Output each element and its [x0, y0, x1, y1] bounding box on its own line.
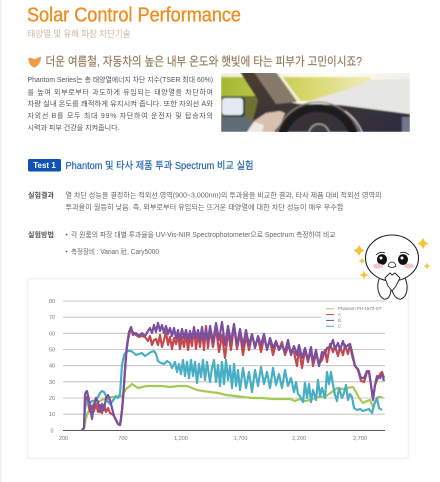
y axis labels: 60 — [49, 331, 55, 337]
x axis labels: 2,200 — [292, 436, 306, 442]
test result text: 열 차단 성능을 결정하는 적외선 영역(900~3,000nm)의 투과율을 비교한 결과, 타사 제품 대비 적외선 영역의 — [66, 190, 382, 200]
label: test result: 실험결과 — [28, 190, 55, 200]
y axis labels: 10 — [49, 412, 55, 418]
test method list: 각 원룸의 파장 대별 투과율을 UV-Vis-NIR Spectrophotometer으로 Spectrum 측정하여 비교 — [71, 230, 336, 239]
sparkles — [354, 238, 430, 280]
y axis labels: 40 — [49, 364, 55, 370]
series: B — [82, 322, 384, 430]
x axis labels — [59, 436, 367, 442]
x axis labels: 1,200 — [174, 436, 188, 442]
x axis labels: 2,700 — [353, 436, 367, 442]
intro paragraph: 차량 실내 온도를 쾌적하게 유지시켜 줍니다. 또한 자외선 A와 — [28, 99, 214, 108]
intro paragraph — [28, 75, 214, 132]
character mouth — [388, 262, 396, 268]
y axis labels: 0 — [50, 428, 54, 434]
character eyes — [376, 252, 409, 265]
test heading: Phantom 및 타사 제품 투과 Spectrum 비교 실험 — [66, 160, 254, 172]
title: Solar Control Performance — [27, 4, 241, 26]
test badge — [28, 159, 61, 172]
y axis labels: 30 — [49, 380, 55, 386]
chart legend: B — [338, 318, 341, 323]
test badge: Test 1 — [33, 161, 56, 170]
icon: orange heart — [28, 56, 41, 68]
intro paragraph: 자외선 B를 모두 최대 99% 자단하여 운전자 및 탑승자의 — [28, 111, 213, 120]
series lines — [82, 322, 384, 430]
y axis labels: 20 — [49, 396, 55, 402]
intro paragraph: Phantom Series는 총 태양열에너지 차단 지수(TSER 최대 60%) — [28, 75, 213, 84]
x axis labels: 200 — [59, 436, 68, 442]
test result text — [66, 190, 382, 212]
chart legend: C — [338, 324, 341, 329]
section heading: 더운 여름철, 자동차의 높은 내부 온도와 햇빛에 타는 피부가 고민이시죠? — [46, 54, 362, 68]
chart legend: Phantom PH-1570-ST — [338, 306, 382, 311]
series: C — [82, 351, 382, 430]
chart card — [28, 278, 408, 458]
character: pleading face with sparkles — [354, 235, 430, 299]
y axis labels: 80 — [49, 299, 55, 305]
intro paragraph: 시력과 피부 건강을 지켜줍니다. — [28, 123, 120, 132]
intro paragraph: 를 높여 외부로부터 과도하게 유입되는 태양열을 차단하여 — [28, 88, 213, 96]
y axis labels — [49, 299, 55, 434]
test method list — [66, 230, 336, 256]
character arms — [378, 278, 407, 299]
character head — [366, 235, 418, 281]
test method list: 측정장비 : Varian 社, Cary5000 — [71, 247, 159, 256]
chart legend: A — [338, 312, 341, 317]
character hands — [385, 273, 400, 291]
x axis labels: 1,700 — [234, 436, 247, 442]
line chart — [49, 299, 387, 442]
y axis labels: 70 — [49, 315, 55, 321]
test result text: 투과율이 월등히 낮음. 즉, 외부로부터 유입되는 뜨거운 태양열에 대한 차단 성능이 매우 우수함 — [66, 202, 344, 212]
y axis labels: 50 — [49, 348, 55, 354]
chart legend — [321, 304, 387, 330]
series: A — [82, 326, 384, 430]
subtitle: 태양열 및 유해 파장 차단기술 — [28, 28, 130, 39]
x axis labels: 700 — [118, 436, 128, 442]
label: test method: 실험방법 — [28, 230, 54, 239]
photo: hand on steering wheel — [221, 73, 410, 132]
character cheeks — [373, 263, 414, 269]
series: Phantom PH-1570-ST — [82, 384, 383, 430]
